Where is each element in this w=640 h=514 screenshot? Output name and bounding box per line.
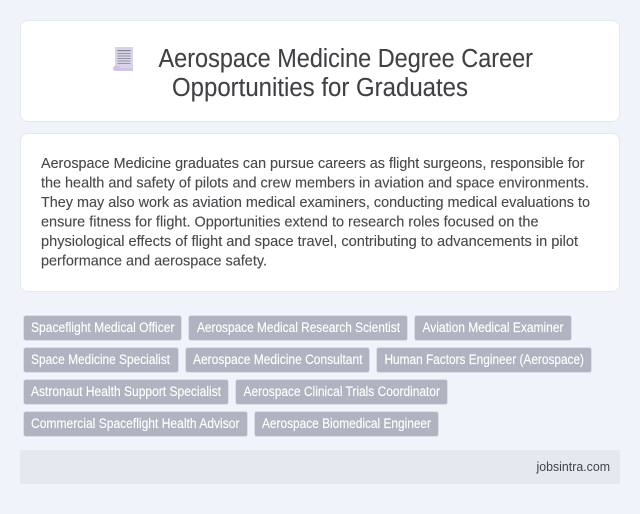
tag	[376, 348, 592, 372]
tag	[188, 316, 408, 340]
text block: description paragraph: the health and safety of pilots and crew members in aviation and space environments.	[41, 176, 589, 192]
tag	[236, 380, 448, 404]
text block: description paragraph: performance and aerospace safety.	[41, 254, 267, 270]
text block: description paragraph: Aerospace Medicine graduates can pursue careers as flight surgeons, responsible for	[41, 156, 585, 172]
tag: Aerospace Medicine Consultant	[193, 352, 363, 367]
tag	[24, 316, 182, 340]
heading: Aerospace Medicine Degree Career	[158, 45, 533, 73]
footer source text: jobsintra.com	[536, 459, 610, 474]
tag: Aerospace Biomedical Engineer	[262, 416, 431, 431]
tag	[24, 412, 248, 436]
footer bar	[20, 450, 620, 484]
tag: Spaceflight Medical Officer	[31, 320, 175, 335]
tag: Aerospace Clinical Trials Coordinator	[244, 384, 440, 399]
tag: Aerospace Medical Research Scientist	[197, 320, 400, 335]
tag: Human Factors Engineer (Aerospace)	[384, 352, 584, 367]
text block: description paragraph: They may also work as aviation medical examiners, conducting medical evaluations to	[41, 195, 590, 211]
panel: description	[20, 134, 620, 292]
tag	[414, 316, 572, 340]
tag: Aviation Medical Examiner	[422, 320, 564, 335]
icon: paper scroll	[113, 47, 133, 71]
text block: description paragraph: physiological effects of flight and space travel, contributing to advancements in pilot	[41, 234, 578, 250]
panel: career tags	[24, 316, 592, 436]
tag	[186, 348, 370, 372]
text block: description paragraph	[41, 156, 590, 270]
heading: Opportunities for Graduates	[172, 74, 468, 102]
tag: Astronaut Health Support Specialist	[31, 384, 221, 399]
panel: title card	[20, 20, 620, 122]
tag	[254, 412, 438, 436]
tag	[24, 348, 178, 372]
heading	[158, 45, 533, 102]
tag	[24, 380, 228, 404]
text block: description paragraph: ensure fitness for flight. Opportunities extend to research roles focused on the	[41, 214, 538, 230]
tag: Commercial Spaceflight Health Advisor	[31, 416, 240, 431]
tag: Space Medicine Specialist	[31, 352, 170, 367]
